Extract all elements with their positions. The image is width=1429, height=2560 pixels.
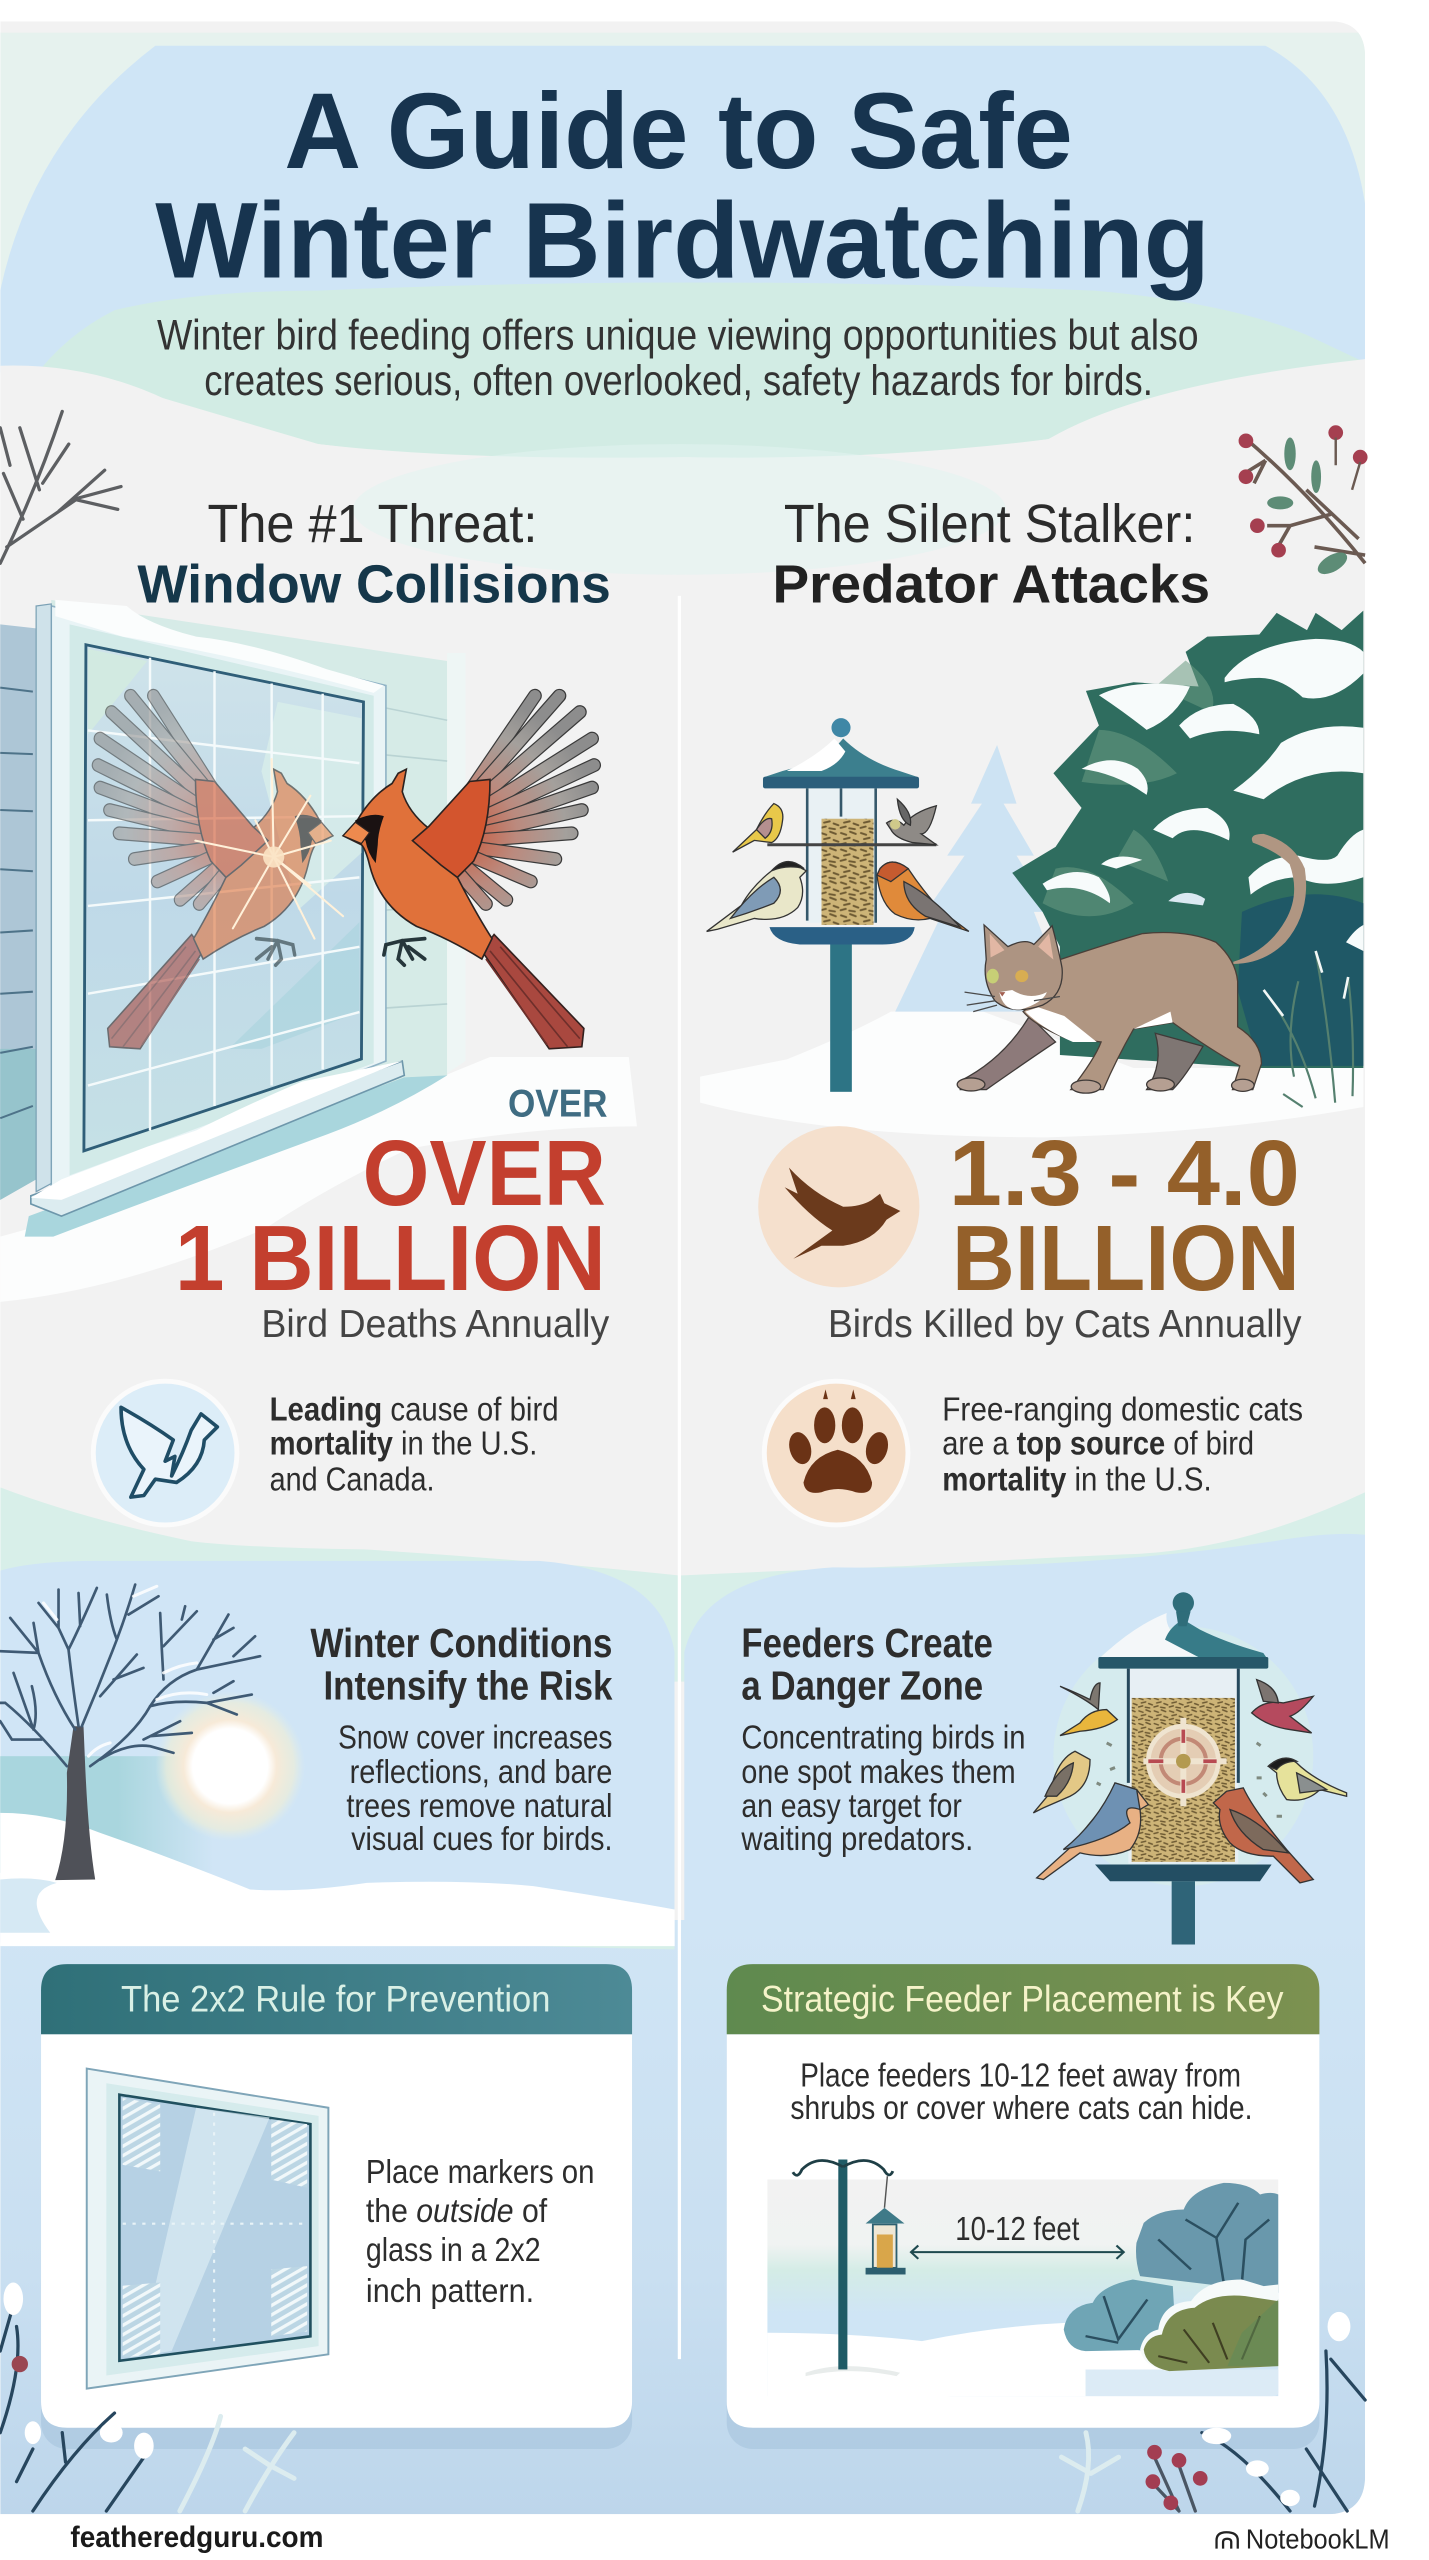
text: feeders danger zone: a Danger Zone	[741, 1663, 983, 1709]
text: place markers	[366, 2154, 594, 2310]
text: place feeders	[790, 2058, 1252, 2127]
big stat: cats	[949, 1121, 1300, 1310]
text: leading cause: Leading cause of bird	[270, 1391, 559, 1428]
big stat: cats: 1.3 - 4.0	[949, 1121, 1300, 1225]
grey snow hills	[0, 359, 1365, 439]
snow ground	[700, 1009, 1363, 1137]
siding lines	[386, 708, 447, 1008]
decoration: bottom left branches	[0, 2282, 294, 2511]
snow ground	[0, 1057, 637, 1302]
sill	[31, 1061, 404, 1216]
text: feeders danger zone	[741, 1620, 1026, 1858]
big stat: over 1 billion: 1 BILLION	[175, 1206, 606, 1310]
faint mint behind headings	[353, 444, 1006, 575]
text: free-ranging cats	[942, 1391, 1303, 1499]
text: free-ranging cats: are a top source of bird	[942, 1426, 1254, 1463]
text: free-ranging cats: mortality in the U.S.	[942, 1462, 1212, 1499]
arrow	[911, 2245, 1124, 2259]
title	[155, 70, 1210, 301]
shrubs	[1136, 2183, 1278, 2293]
reflected cardinal	[98, 696, 333, 1049]
footer: NotebookLM logo: NotebookLM	[1246, 2524, 1390, 2555]
illustration: winter tree and sun	[0, 1585, 675, 1946]
seed specks	[1097, 1743, 1282, 1816]
text: place feeders: shrubs or cover where cats can hide.	[790, 2090, 1252, 2127]
card: 2x2 rule: The 2x2 Rule for Prevention	[121, 1978, 550, 2019]
subtitle	[157, 311, 1199, 404]
illustration: feeder, tree and cat	[700, 611, 1363, 1137]
grey bird	[887, 799, 936, 845]
text: feeders danger zone: an easy target for	[741, 1788, 962, 1825]
card: feeder placement: Strategic Feeder Placement is Key	[761, 1978, 1284, 2019]
scene	[767, 2160, 1278, 2401]
illustration: window with cardinal	[0, 600, 637, 1302]
snow hills	[0, 1813, 675, 1946]
illustration: feeder with target	[1033, 1592, 1347, 1945]
heading: predator attacks	[772, 494, 1210, 614]
card header	[727, 1964, 1319, 2034]
text: feeders danger zone: one spot makes them	[741, 1754, 1016, 1791]
yellow bird	[733, 804, 783, 852]
cat	[957, 834, 1306, 1093]
big stat: over 1 billion: OVER	[363, 1121, 606, 1225]
sun	[155, 1691, 305, 1841]
big stat: over 1 billion	[175, 1121, 606, 1310]
hanging feeder	[866, 2208, 906, 2274]
text: winter conditions: Winter Conditions	[310, 1620, 612, 1666]
big stat: cats: BILLION	[952, 1206, 1300, 1310]
pole	[838, 2160, 847, 2369]
wall trim	[447, 653, 466, 1073]
text: feeders danger zone: Concentrating birds in	[741, 1720, 1026, 1757]
feeder	[707, 718, 969, 1092]
roof	[1100, 1613, 1207, 1658]
text: leading cause	[270, 1391, 559, 1499]
icon: broken bird outline	[93, 1381, 237, 1525]
text: feeders danger zone: waiting predators.	[741, 1821, 973, 1858]
bottom blue band	[0, 1920, 1365, 2514]
snow on top of frame	[55, 600, 384, 693]
decoration: berry branch top right	[1239, 425, 1368, 578]
title: Winter Birdwatching	[155, 180, 1210, 301]
chickadee	[707, 862, 806, 931]
text: leading cause: mortality in the U.S.	[270, 1426, 537, 1463]
heading: predator attacks: Predator Attacks	[772, 554, 1210, 614]
decoration: bare branch top left	[0, 411, 121, 563]
heading: window collisions: The #1 Threat:	[208, 494, 537, 554]
text: place markers: inch pattern.	[366, 2273, 534, 2310]
robin	[877, 862, 969, 931]
lower blue panels	[0, 1561, 674, 1943]
title: A Guide to Safe	[284, 70, 1073, 191]
glass grid	[88, 658, 359, 1130]
text: leading cause: and Canada.	[270, 1462, 434, 1499]
icon: window with markers	[87, 2069, 328, 2389]
mint snow band under title	[33, 282, 1365, 458]
text: place feeders: Place feeders 10-12 feet away from	[800, 2058, 1241, 2095]
stat caption: bird deaths: Bird Deaths Annually	[261, 1303, 610, 1346]
card: feeder placement	[727, 1964, 1319, 2449]
distance label: 10-12 feet	[955, 2211, 1080, 2248]
text: place markers: the outside of	[366, 2193, 548, 2230]
footer: source: featheredguru.com	[70, 2521, 323, 2554]
decoration: bottom right branches	[1061, 2312, 1365, 2511]
text: free-ranging cats: Free-ranging domestic cats	[942, 1391, 1303, 1428]
centre divider	[678, 596, 680, 2359]
text: winter conditions: Intensify the Risk	[323, 1663, 613, 1709]
target	[1143, 1718, 1227, 1806]
window frame	[51, 606, 386, 1192]
subtitle: Winter bird feeding offers unique viewing opportunities but also	[157, 311, 1199, 358]
birds	[1033, 1680, 1347, 1883]
text: winter conditions: Snow cover increases	[338, 1720, 612, 1757]
glass reflection	[261, 702, 361, 910]
twigs by cat	[1264, 951, 1353, 1107]
small stat: over: OVER	[508, 1083, 608, 1126]
left siding	[0, 624, 36, 1200]
card: 2x2 rule	[41, 1964, 632, 2449]
mint band above lower panels	[0, 1487, 1365, 1682]
evergreen tree	[1012, 611, 1363, 1068]
card header	[41, 1964, 632, 2034]
text: place markers: Place markers on	[366, 2154, 595, 2191]
pale mint top edges	[0, 32, 1365, 288]
text: winter conditions: visual cues for birds.	[351, 1821, 612, 1858]
heading: window collisions	[137, 494, 611, 614]
cardinal	[343, 696, 594, 1049]
impact star	[195, 759, 343, 939]
subtitle: creates serious, often overlooked, safety hazards for birds.	[204, 357, 1153, 404]
text: winter conditions: trees remove natural	[346, 1788, 612, 1825]
text: feeders danger zone: Feeders Create	[741, 1620, 993, 1666]
house wall	[51, 600, 447, 1237]
header sky	[0, 46, 1365, 372]
heading: predator attacks: The Silent Stalker:	[784, 494, 1195, 554]
teal horizon	[0, 1756, 213, 1873]
text: place markers: glass in a 2x2	[366, 2232, 541, 2269]
ground snow	[767, 2323, 1162, 2401]
tree	[0, 1585, 260, 1880]
stat caption: cats: Birds Killed by Cats Annually	[828, 1303, 1302, 1346]
tray	[1095, 1865, 1272, 1881]
icon: paw print	[764, 1381, 908, 1525]
pale distant tree	[895, 745, 1073, 1012]
sill shadow	[25, 1075, 447, 1237]
heading: window collisions: Window Collisions	[137, 554, 611, 614]
glass	[84, 645, 363, 1151]
icon: bird silhouette circle	[758, 1126, 919, 1287]
text: winter conditions	[310, 1620, 613, 1858]
text: winter conditions: reflections, and bare	[350, 1754, 612, 1791]
